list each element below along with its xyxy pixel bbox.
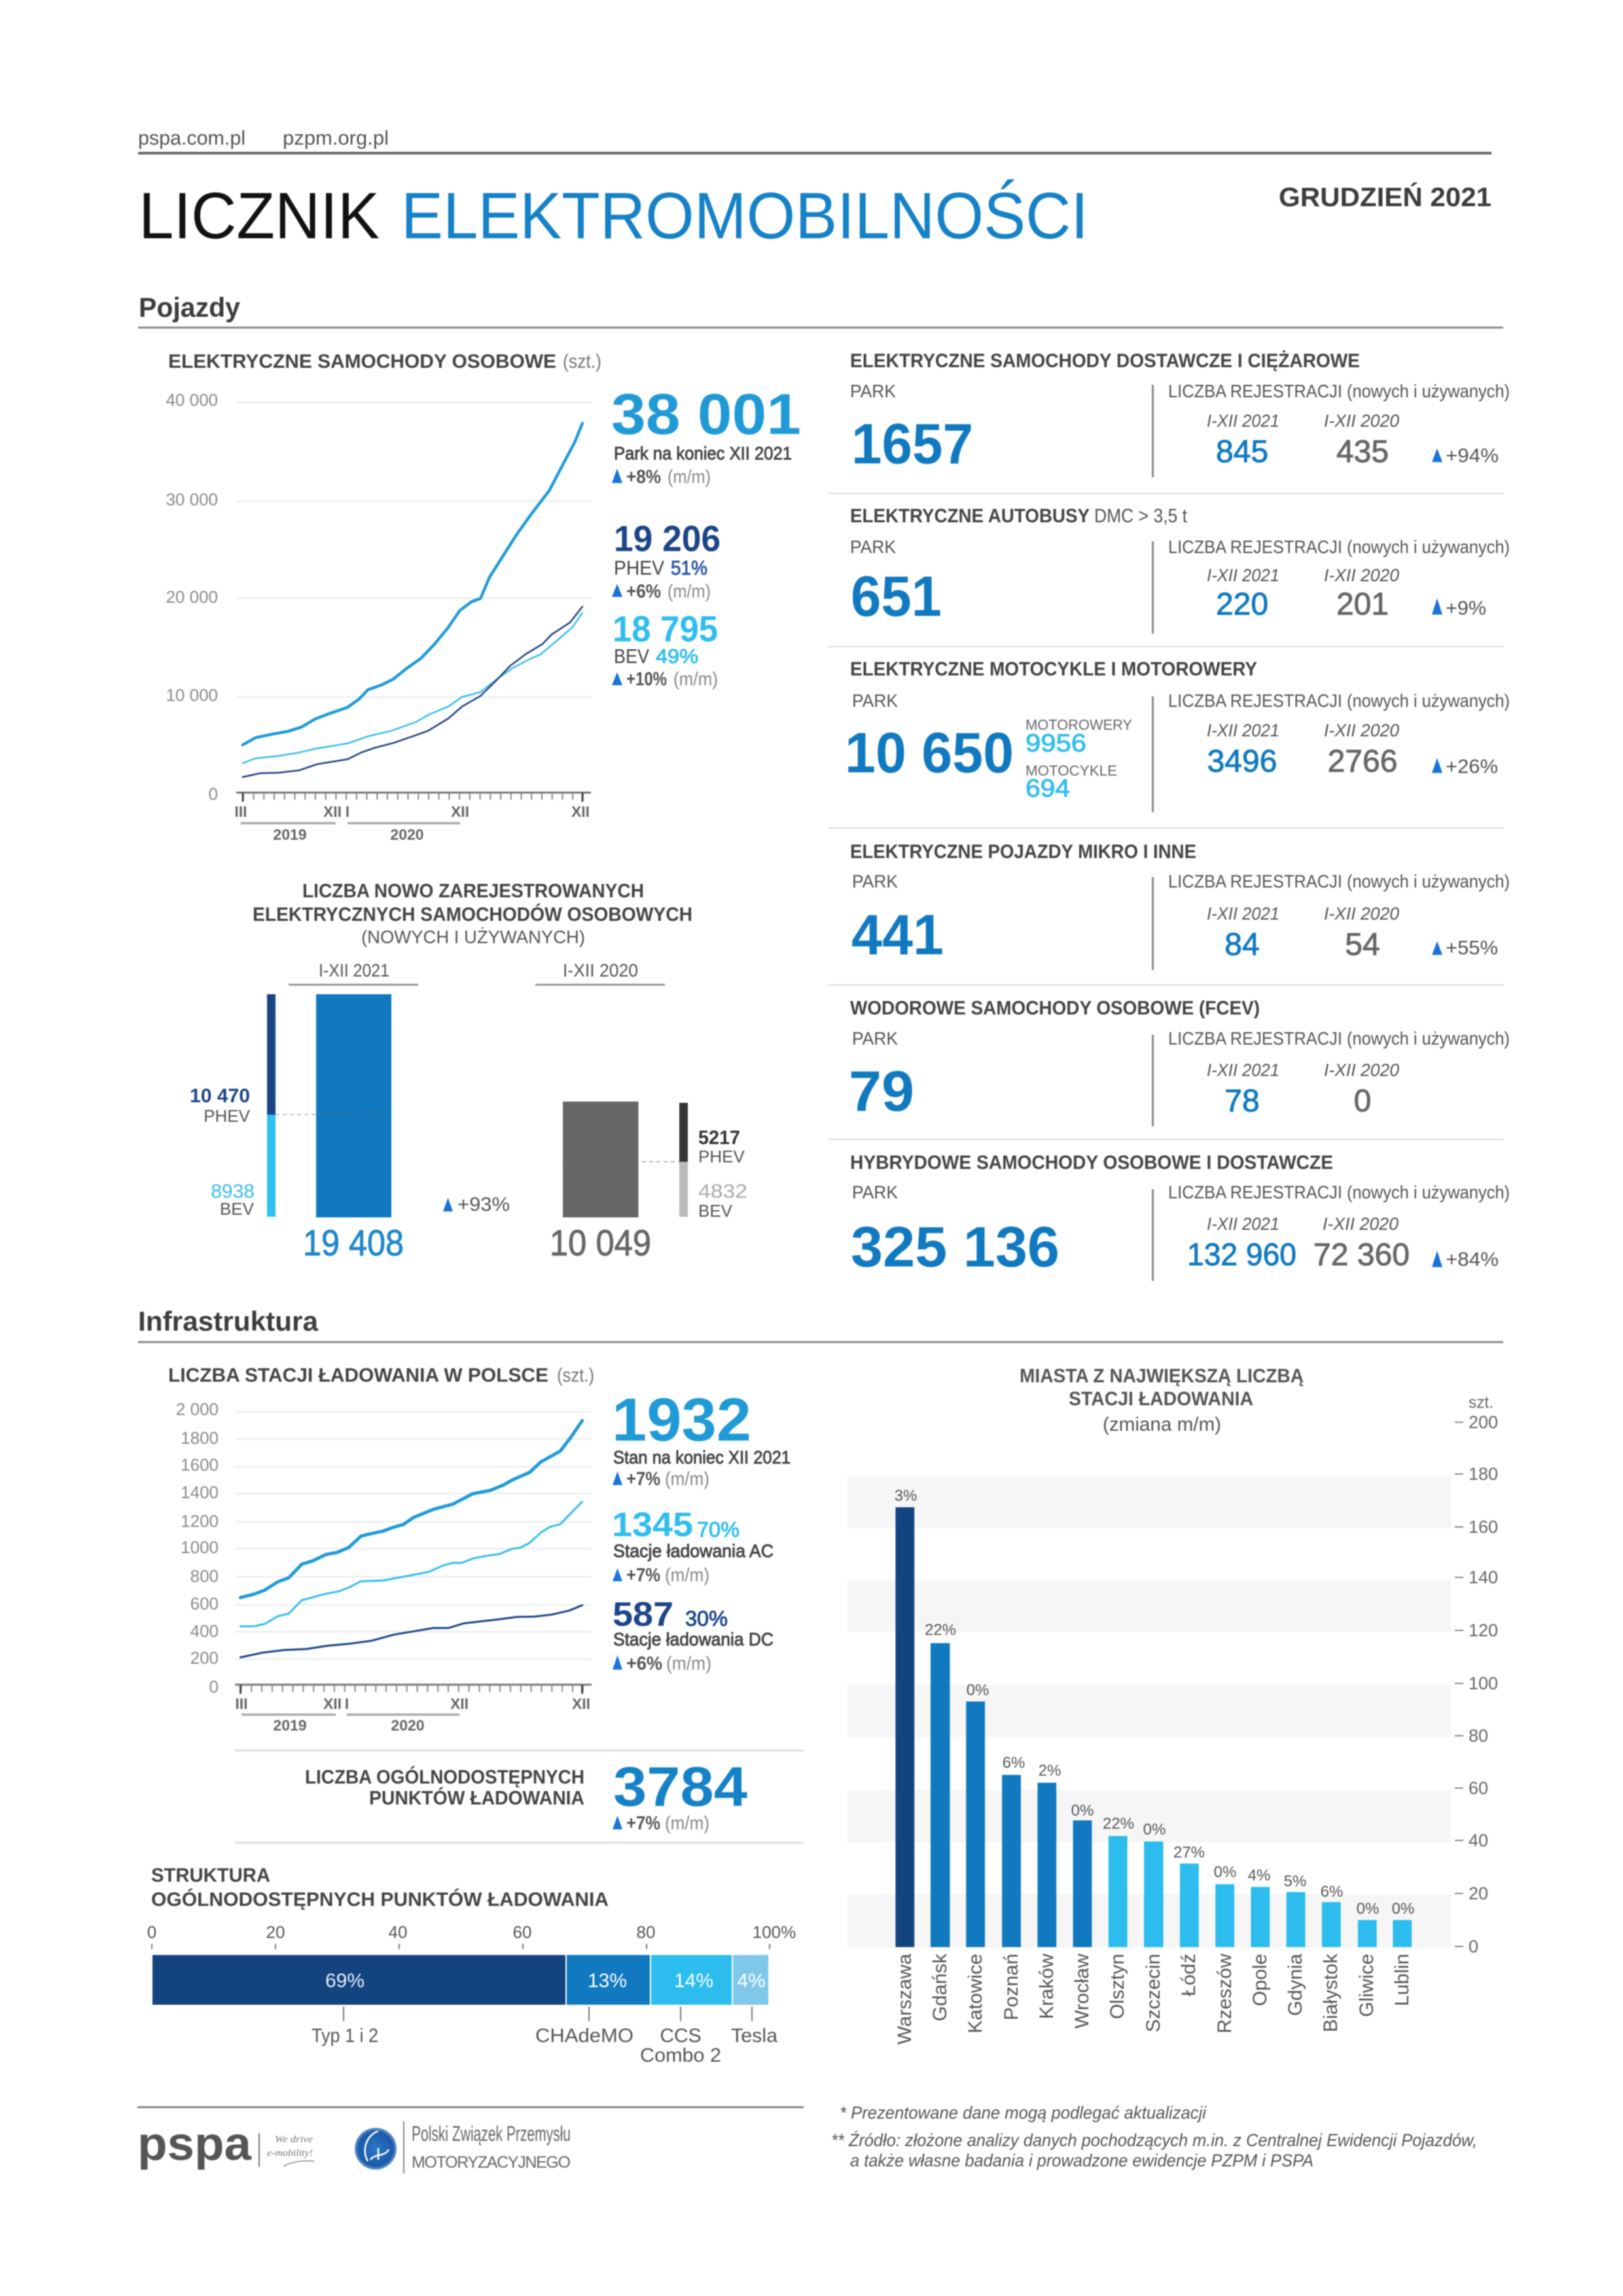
y axis: 180 <box>1469 1464 1498 1484</box>
footnotes: * Prezentowane dane mogą podlegać aktualizacji <box>840 2103 1207 2123</box>
city labels: Gliwice <box>1356 1954 1378 2017</box>
heading: STACJI ŁADOWANIA <box>1069 1388 1253 1410</box>
bar 2020: 5217 <box>698 1127 740 1149</box>
column label 2020 <box>535 960 665 986</box>
x axis: 2020 <box>391 1717 425 1734</box>
y axis labels: 200 <box>190 1648 219 1668</box>
header links: pspa.com.pl <box>138 126 245 149</box>
panel: vans and trucks: 1657 <box>851 412 973 476</box>
panel: micro vehicles <box>829 841 1510 986</box>
x axis: XII <box>451 803 469 820</box>
heading <box>253 880 692 947</box>
city labels: Białystok <box>1320 1953 1342 2032</box>
y axis labels: 600 <box>190 1594 219 1613</box>
stat: PHEV: 19 206 <box>614 518 721 559</box>
heading: (NOWYCH I UŻYWANYCH) <box>361 927 585 947</box>
scale: 80 <box>637 1922 655 1942</box>
y axis: 120 <box>1469 1621 1498 1640</box>
panel: motorcycles and mopeds: 9956 <box>1026 730 1086 757</box>
line: PHEV <box>243 607 582 777</box>
panel: buses: +9% <box>1446 598 1486 619</box>
section heading: Pojazdy <box>138 292 1503 329</box>
x axis: 2019 <box>273 1717 307 1734</box>
panel: vans and trucks: PARK <box>850 381 896 401</box>
y axis: szt. <box>1469 1393 1493 1412</box>
scale: 40 <box>389 1922 407 1942</box>
y axis labels <box>176 1399 219 1696</box>
stat: BEV: 49% <box>656 645 698 668</box>
panel: hybrid cars: 325 136 <box>851 1215 1060 1279</box>
panel: hybrid cars: 72 360 <box>1313 1238 1410 1272</box>
scale: 100% <box>753 1922 796 1942</box>
footnotes: a także własne badania i prowadzone ewidencje PZPM i PSPA <box>850 2151 1313 2170</box>
x axis: XII <box>450 1695 469 1712</box>
panel: public charging points: PUNKTÓW ŁADOWANIA <box>369 1787 584 1809</box>
x axis: XII <box>572 1695 590 1712</box>
panel: public charging points <box>235 1749 804 1844</box>
x axis: XII <box>323 1695 342 1712</box>
bar 2021: PHEV <box>204 1106 251 1126</box>
city labels: Gdynia <box>1285 1954 1306 2016</box>
x axis <box>235 1685 592 1734</box>
segment labels: Tesla <box>731 2025 777 2047</box>
heading <box>151 1865 609 1910</box>
x axis: I <box>345 1695 349 1712</box>
header links <box>138 126 1491 154</box>
footnotes <box>831 2103 1477 2170</box>
logo: PZPM <box>355 2121 571 2174</box>
panel: micro vehicles: +55% <box>1446 937 1498 959</box>
panel: motorcycles and mopeds: 2766 <box>1328 744 1397 779</box>
column label 2021 <box>289 960 418 986</box>
stat: AC: Stacje ładowania AC <box>613 1541 774 1561</box>
panel: hydrogen cars: WODOROWE SAMOCHODY OSOBOWE (FCEV) <box>850 997 1260 1019</box>
panel: motorcycles and mopeds: ELEKTRYCZNE MOTOCYKLE I MOTOROWERY <box>850 658 1257 680</box>
city labels: Szczecin <box>1143 1954 1164 2032</box>
logo: PSPA: We drive <box>275 2134 313 2145</box>
line: total stations <box>240 1421 582 1657</box>
panel: hybrid cars: PARK <box>852 1182 898 1202</box>
percent labels: 0% <box>1071 1802 1094 1820</box>
panel: hydrogen cars: 79 <box>849 1060 914 1123</box>
panel: buses: LICZBA REJESTRACJI (nowych i używanych) <box>1168 537 1510 557</box>
panel: micro vehicles: ELEKTRYCZNE POJAZDY MIKRO I INNE <box>850 841 1196 863</box>
percent labels: 22% <box>925 1621 956 1639</box>
panel: hybrid cars <box>850 1152 1510 1281</box>
section heading: Infrastruktura: Infrastruktura <box>138 1306 319 1336</box>
panel: motorcycles and mopeds: I-XII 2021 <box>1207 721 1279 740</box>
y axis: 40 <box>1469 1831 1488 1850</box>
y axis: 160 <box>1469 1517 1498 1537</box>
y axis: 140 <box>1469 1568 1498 1587</box>
percent labels: 6% <box>1321 1883 1343 1901</box>
x axis: 2020 <box>390 826 424 843</box>
panel: hydrogen cars: 0 <box>1354 1084 1371 1119</box>
stat: total stations: +7% <box>626 1469 660 1490</box>
y axis labels: 400 <box>190 1621 219 1641</box>
panel: hydrogen cars: LICZBA REJESTRACJI (nowych i używanych) <box>1168 1028 1510 1049</box>
stat: PHEV <box>612 518 721 602</box>
panel: buses: ELEKTRYCZNE AUTOBUSY <box>850 505 1090 527</box>
city labels: Poznań <box>1001 1954 1022 2020</box>
panel: vans and trucks: I-XII 2021 <box>1207 411 1279 431</box>
y axis labels: 1000 <box>181 1537 219 1557</box>
line: BEV <box>243 613 582 763</box>
stat: total stations: (m/m) <box>665 1469 709 1490</box>
x axis: XII <box>571 803 590 820</box>
stat: total: (m/m) <box>668 467 711 488</box>
y axis labels: 1200 <box>181 1511 219 1531</box>
stat: AC <box>612 1506 774 1586</box>
panel: motorcycles and mopeds: 10 650 <box>845 721 1014 785</box>
percent labels: 0% <box>1357 1900 1379 1918</box>
footer rule <box>137 2106 804 2108</box>
panel: hybrid cars: LICZBA REJESTRACJI (nowych i używanych) <box>1168 1182 1510 1202</box>
stat: BEV: (m/m) <box>673 669 718 690</box>
heading: ELEKTRYCZNYCH SAMOCHODÓW OSOBOWYCH <box>253 903 692 925</box>
scale: 20 <box>266 1922 285 1942</box>
y axis: 20 <box>1469 1884 1488 1903</box>
scale: 60 <box>513 1922 531 1942</box>
y axis: 60 <box>1469 1778 1488 1798</box>
bar 2021: 19 408 <box>303 1222 404 1263</box>
y axis labels: 30 000 <box>166 490 218 509</box>
panel: micro vehicles: 441 <box>851 903 944 967</box>
stat: DC <box>613 1596 774 1674</box>
stacked bar: 69% <box>325 1970 365 1992</box>
panel: motorcycles and mopeds <box>829 658 1510 829</box>
heading: (szt.) <box>557 1365 594 1386</box>
segment labels <box>312 2007 777 2066</box>
stat: DC: 30% <box>685 1607 728 1630</box>
city labels: Wrocław <box>1071 1954 1093 2028</box>
x axis: III <box>235 1695 248 1712</box>
x axis <box>234 793 591 843</box>
heading: OGÓLNODOSTĘPNYCH PUNKTÓW ŁADOWANIA <box>151 1888 609 1910</box>
stat: total <box>611 382 801 488</box>
bar 2021: 10 470 <box>190 1085 250 1107</box>
heading: LICZBA STACJI ŁADOWANIA W POLSCE <box>168 1365 548 1386</box>
bar 2020 <box>550 1102 747 1263</box>
heading: ELEKTRYCZNE SAMOCHODY OSOBOWE <box>168 351 556 372</box>
panel: buses: PARK <box>850 537 896 557</box>
x axis: XII <box>323 803 342 820</box>
segment labels: CHAdeMO <box>535 2025 633 2047</box>
stat: DC: +6% <box>626 1653 662 1674</box>
panel: hydrogen cars: I-XII 2021 <box>1207 1060 1279 1080</box>
stat: DC: Stacje ładowania DC <box>613 1629 774 1649</box>
stat: PHEV: (m/m) <box>668 581 711 602</box>
section heading: Pojazdy: Pojazdy <box>139 292 241 323</box>
logo: PSPA: pspa <box>137 2118 252 2170</box>
city labels: Lublin <box>1391 1954 1413 2006</box>
section heading: Infrastruktura <box>138 1306 1503 1343</box>
logo: PZPM: MOTORYZACYJNEGO <box>412 2153 571 2172</box>
stat: AC: (m/m) <box>665 1565 709 1586</box>
y axis: 100 <box>1469 1674 1498 1693</box>
percent labels: 0% <box>1392 1900 1414 1918</box>
panel: public charging points: +7% <box>626 1813 660 1834</box>
panel: vans and trucks: I-XII 2020 <box>1324 411 1399 431</box>
stacked bar: 14% <box>674 1970 713 1992</box>
panel: buses: 201 <box>1336 587 1389 622</box>
panel: cities bar chart <box>847 1365 1498 2045</box>
line: total <box>243 423 582 777</box>
city labels <box>894 1953 1413 2045</box>
stat: total stations <box>612 1386 791 1490</box>
panel: structure of charging points <box>147 1865 796 2066</box>
bar 2021: 8938 <box>211 1181 255 1202</box>
city labels: Rzeszów <box>1214 1954 1236 2034</box>
bar 2020: 4832 <box>698 1181 747 1202</box>
change +93%: +93% <box>457 1194 510 1215</box>
scale <box>147 1922 796 1949</box>
panel: hybrid cars: HYBRYDOWE SAMOCHODY OSOBOWE I DOSTAWCZE <box>850 1152 1333 1174</box>
line: AC stations <box>240 1501 582 1626</box>
segment labels: Combo 2 <box>640 2045 721 2066</box>
panel: micro vehicles: I-XII 2021 <box>1207 904 1279 924</box>
segment labels: Typ 1 i 2 <box>312 2025 378 2047</box>
percent labels: 0% <box>1214 1863 1236 1881</box>
panel: micro vehicles: LICZBA REJESTRACJI (nowych i używanych) <box>1168 871 1510 891</box>
city labels: Warszawa <box>894 1954 916 2045</box>
panel: hybrid cars: 132 960 <box>1187 1238 1296 1272</box>
stat: DC: 587 <box>613 1596 673 1634</box>
city labels: Łódź <box>1178 1954 1200 1996</box>
percent labels: 0% <box>967 1681 989 1699</box>
y axis labels: 0 <box>209 784 218 804</box>
y axis labels: 1600 <box>181 1455 219 1475</box>
panel: motorcycles and mopeds: I-XII 2020 <box>1324 721 1399 740</box>
panel: micro vehicles: PARK <box>852 871 898 891</box>
stat: AC: +7% <box>626 1565 660 1586</box>
panel: hybrid cars: I-XII 2021 <box>1207 1214 1279 1234</box>
y axis labels: 2 000 <box>176 1399 219 1419</box>
panel: public charging points: LICZBA OGÓLNODOSTĘPNYCH <box>305 1766 584 1788</box>
panel: vans and trucks <box>829 350 1510 494</box>
city labels: Opole <box>1249 1954 1271 2006</box>
panel: newly registered electric cars bars <box>190 880 747 1263</box>
panel: hybrid cars: I-XII 2020 <box>1323 1214 1399 1234</box>
title: LICZNIK <box>139 179 380 253</box>
panel: motorcycles and mopeds: +26% <box>1446 756 1498 778</box>
heading: (zmiana m/m) <box>1103 1414 1221 1435</box>
bars <box>895 1507 1412 1947</box>
heading: STRUKTURA <box>151 1865 270 1886</box>
logo: PZPM: Polski Związek Przemysłu <box>412 2122 571 2145</box>
stat: total: 38 001 <box>611 382 801 446</box>
stat: BEV: BEV <box>614 645 649 668</box>
stat: PHEV: 51% <box>671 556 707 579</box>
stat: total stations: Stan na koniec XII 2021 <box>613 1447 791 1467</box>
y axis: 0 <box>1469 1937 1478 1956</box>
panel: vans and trucks: 435 <box>1336 435 1389 469</box>
percent labels: 2% <box>1039 1762 1061 1780</box>
bar 2021: BEV <box>220 1199 255 1219</box>
percent labels: 5% <box>1284 1873 1306 1890</box>
stacked bar: 13% <box>588 1970 627 1992</box>
y axis: 200 <box>1469 1412 1498 1432</box>
y axis labels: 10 000 <box>166 685 218 705</box>
panel: buses: DMC > 3,5 t <box>1094 505 1188 527</box>
panel: vans and trucks: +94% <box>1446 445 1499 467</box>
panel: motorcycles and mopeds: 694 <box>1026 775 1070 802</box>
stat: PHEV: +6% <box>626 581 661 602</box>
y axis <box>1455 1393 1498 1956</box>
y axis labels: 1400 <box>181 1482 219 1502</box>
x axis: 2019 <box>273 826 307 843</box>
y axis labels: 0 <box>209 1677 219 1696</box>
panel: buses: 220 <box>1216 587 1268 622</box>
line: DC stations <box>240 1605 582 1657</box>
panel: buses: I-XII 2020 <box>1324 565 1399 585</box>
panel: vans and trucks: LICZBA REJESTRACJI (nowych i używanych) <box>1168 381 1510 401</box>
heading <box>1020 1365 1304 1435</box>
header links: pzpm.org.pl <box>283 126 389 149</box>
heading: LICZBA NOWO ZAREJESTROWANYCH <box>302 880 644 902</box>
stat: total: Park na koniec XII 2021 <box>614 443 792 463</box>
heading: (szt.) <box>563 351 601 372</box>
panel: vans and trucks: ELEKTRYCZNE SAMOCHODY DOSTAWCZE I CIĘŻAROWE <box>850 350 1360 372</box>
panel: motorcycles and mopeds: MOTOROWERY <box>1026 717 1132 733</box>
panel: motorcycles and mopeds: LICZBA REJESTRACJI (nowych i używanych) <box>1168 691 1510 711</box>
panel: hydrogen cars: PARK <box>852 1028 898 1049</box>
city labels: Katowice <box>965 1954 986 2034</box>
city labels: Kraków <box>1036 1954 1058 2019</box>
stat: BEV: 18 795 <box>613 608 718 649</box>
panel: hydrogen cars: 78 <box>1224 1084 1260 1119</box>
panel: motorcycles and mopeds: MOTOCYKLE <box>1026 762 1117 779</box>
heading: MIASTA Z NAJWIĘKSZĄ LICZBĄ <box>1020 1365 1304 1387</box>
panel: buses: 651 <box>851 565 942 628</box>
footnotes: ** Źródło: złożone analizy danych pochodzących m.in. z Centralnej Ewidencji Pojazdów, <box>831 2130 1477 2150</box>
panel: hydrogen cars <box>829 997 1510 1140</box>
percent labels: 0% <box>1143 1821 1166 1839</box>
y axis labels: 1800 <box>181 1428 219 1448</box>
bar 2020: PHEV <box>698 1147 745 1166</box>
city labels: Olsztyn <box>1107 1954 1128 2019</box>
percent labels: 4% <box>1248 1867 1270 1884</box>
percent labels: 6% <box>1003 1754 1025 1772</box>
scale: 0 <box>147 1922 156 1942</box>
logo: PSPA: e-mobility! <box>267 2148 313 2159</box>
panel: hybrid cars: +84% <box>1446 1249 1499 1270</box>
stacked bar <box>152 1955 768 2005</box>
panel: motorcycles and mopeds: 3496 <box>1207 744 1277 779</box>
panel: buses: I-XII 2021 <box>1207 565 1279 585</box>
stat: BEV <box>612 608 718 690</box>
stat: AC: 70% <box>697 1518 740 1541</box>
segment labels: CCS <box>660 2025 702 2047</box>
stat: BEV: +10% <box>626 669 667 690</box>
y axis labels: 40 000 <box>166 390 218 410</box>
y axis labels <box>166 390 218 804</box>
x axis: I <box>346 803 349 820</box>
y axis: 80 <box>1469 1726 1488 1746</box>
panel: hydrogen cars: I-XII 2020 <box>1324 1060 1399 1080</box>
bar 2021 <box>190 994 404 1263</box>
panel: public charging points: (m/m) <box>665 1813 709 1834</box>
panel: motorcycles and mopeds: PARK <box>852 691 898 711</box>
column label 2021: I-XII 2021 <box>319 960 389 980</box>
date: GRUDZIEŃ 2021 <box>1279 182 1491 212</box>
panel: buses <box>829 505 1510 647</box>
panel: vans and trucks: 845 <box>1216 435 1268 469</box>
panel: micro vehicles: I-XII 2020 <box>1324 904 1399 924</box>
percent labels <box>895 1487 1414 1918</box>
panel: electric passenger cars line chart <box>166 351 801 843</box>
panel: charging stations line chart <box>168 1365 791 1734</box>
stacked bar: 4% <box>737 1970 766 1992</box>
logo: PSPA <box>137 2118 314 2170</box>
stat: PHEV: PHEV <box>614 556 664 579</box>
y axis labels: 20 000 <box>166 587 218 607</box>
panel: public charging points: 3784 <box>613 1756 747 1818</box>
panel: micro vehicles: 54 <box>1345 927 1380 962</box>
bar 2020: BEV <box>698 1201 733 1221</box>
title: ELEKTROMOBILNOŚCI <box>401 179 1088 253</box>
percent labels: 22% <box>1103 1815 1134 1833</box>
stat: AC: 1345 <box>612 1506 693 1544</box>
panel: micro vehicles: 84 <box>1224 927 1260 962</box>
city labels: Gdańsk <box>929 1953 951 2021</box>
column label 2020: I-XII 2020 <box>563 960 638 980</box>
stat: total: +8% <box>626 467 661 488</box>
percent labels: 3% <box>895 1487 917 1505</box>
stat: DC: (m/m) <box>666 1653 711 1674</box>
bar 2020: 10 049 <box>550 1222 651 1263</box>
percent labels: 27% <box>1173 1844 1205 1861</box>
y axis labels: 800 <box>190 1566 219 1586</box>
stat: total stations: 1932 <box>612 1386 751 1454</box>
x axis: III <box>234 803 247 820</box>
